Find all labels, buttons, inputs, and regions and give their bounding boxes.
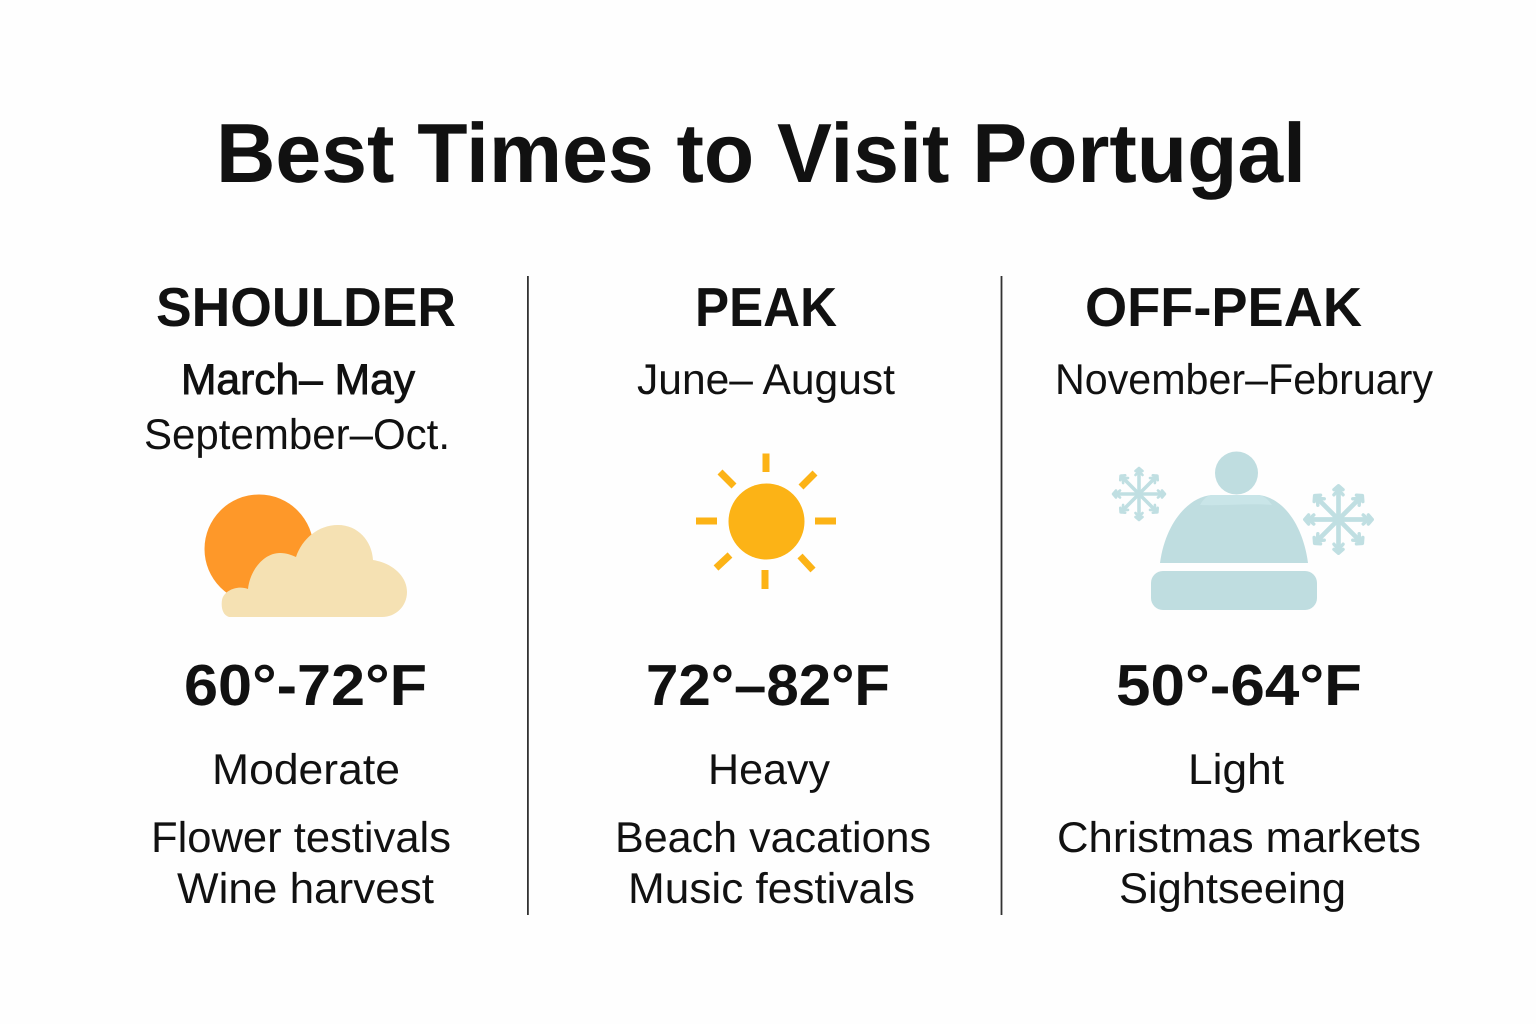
activities: peak: Music festivals — [628, 865, 915, 913]
activities: peak: Beach vacations — [615, 814, 931, 862]
dates: shoulder: March– May — [181, 356, 415, 404]
icon: winter hat with snowflakes — [1113, 452, 1372, 610]
icon: sun behind cloud — [204, 494, 407, 617]
divider right — [1001, 276, 1002, 915]
crowd level: shoulder: Moderate — [212, 746, 400, 794]
activities: shoulder: Flower testivals — [151, 814, 451, 862]
heading: off-peak: OFF-PEAK — [1085, 276, 1362, 338]
temperature: off-peak: 50°-64°F — [1116, 653, 1362, 718]
dates: off-peak: November–February — [1055, 356, 1433, 404]
activities: off-peak: Christmas markets — [1057, 814, 1421, 862]
title: Best Times to Visit Portugal — [216, 106, 1306, 200]
activities: off-peak — [1057, 814, 1421, 913]
panel: peak season — [615, 276, 931, 913]
panel: shoulder season — [144, 276, 456, 913]
heading: peak: PEAK — [695, 276, 837, 338]
divider left — [527, 276, 529, 915]
dates: peak: June– August — [637, 356, 895, 404]
crowd level: off-peak: Light — [1188, 746, 1284, 794]
temperature: shoulder: 60°-72°F — [184, 653, 427, 718]
activities: peak — [615, 814, 931, 913]
activities: shoulder: Wine harvest — [177, 865, 434, 913]
temperature: peak: 72°–82°F — [646, 653, 890, 718]
heading: shoulder: SHOULDER — [156, 276, 456, 338]
crowd level: peak: Heavy — [708, 746, 830, 794]
panel: off-peak season — [1055, 276, 1433, 913]
icon: sun — [696, 454, 836, 589]
dates: shoulder — [144, 356, 450, 459]
activities: shoulder — [151, 814, 451, 913]
activities: off-peak: Sightseeing — [1119, 865, 1346, 913]
dates: shoulder: September–Oct. — [144, 411, 450, 459]
